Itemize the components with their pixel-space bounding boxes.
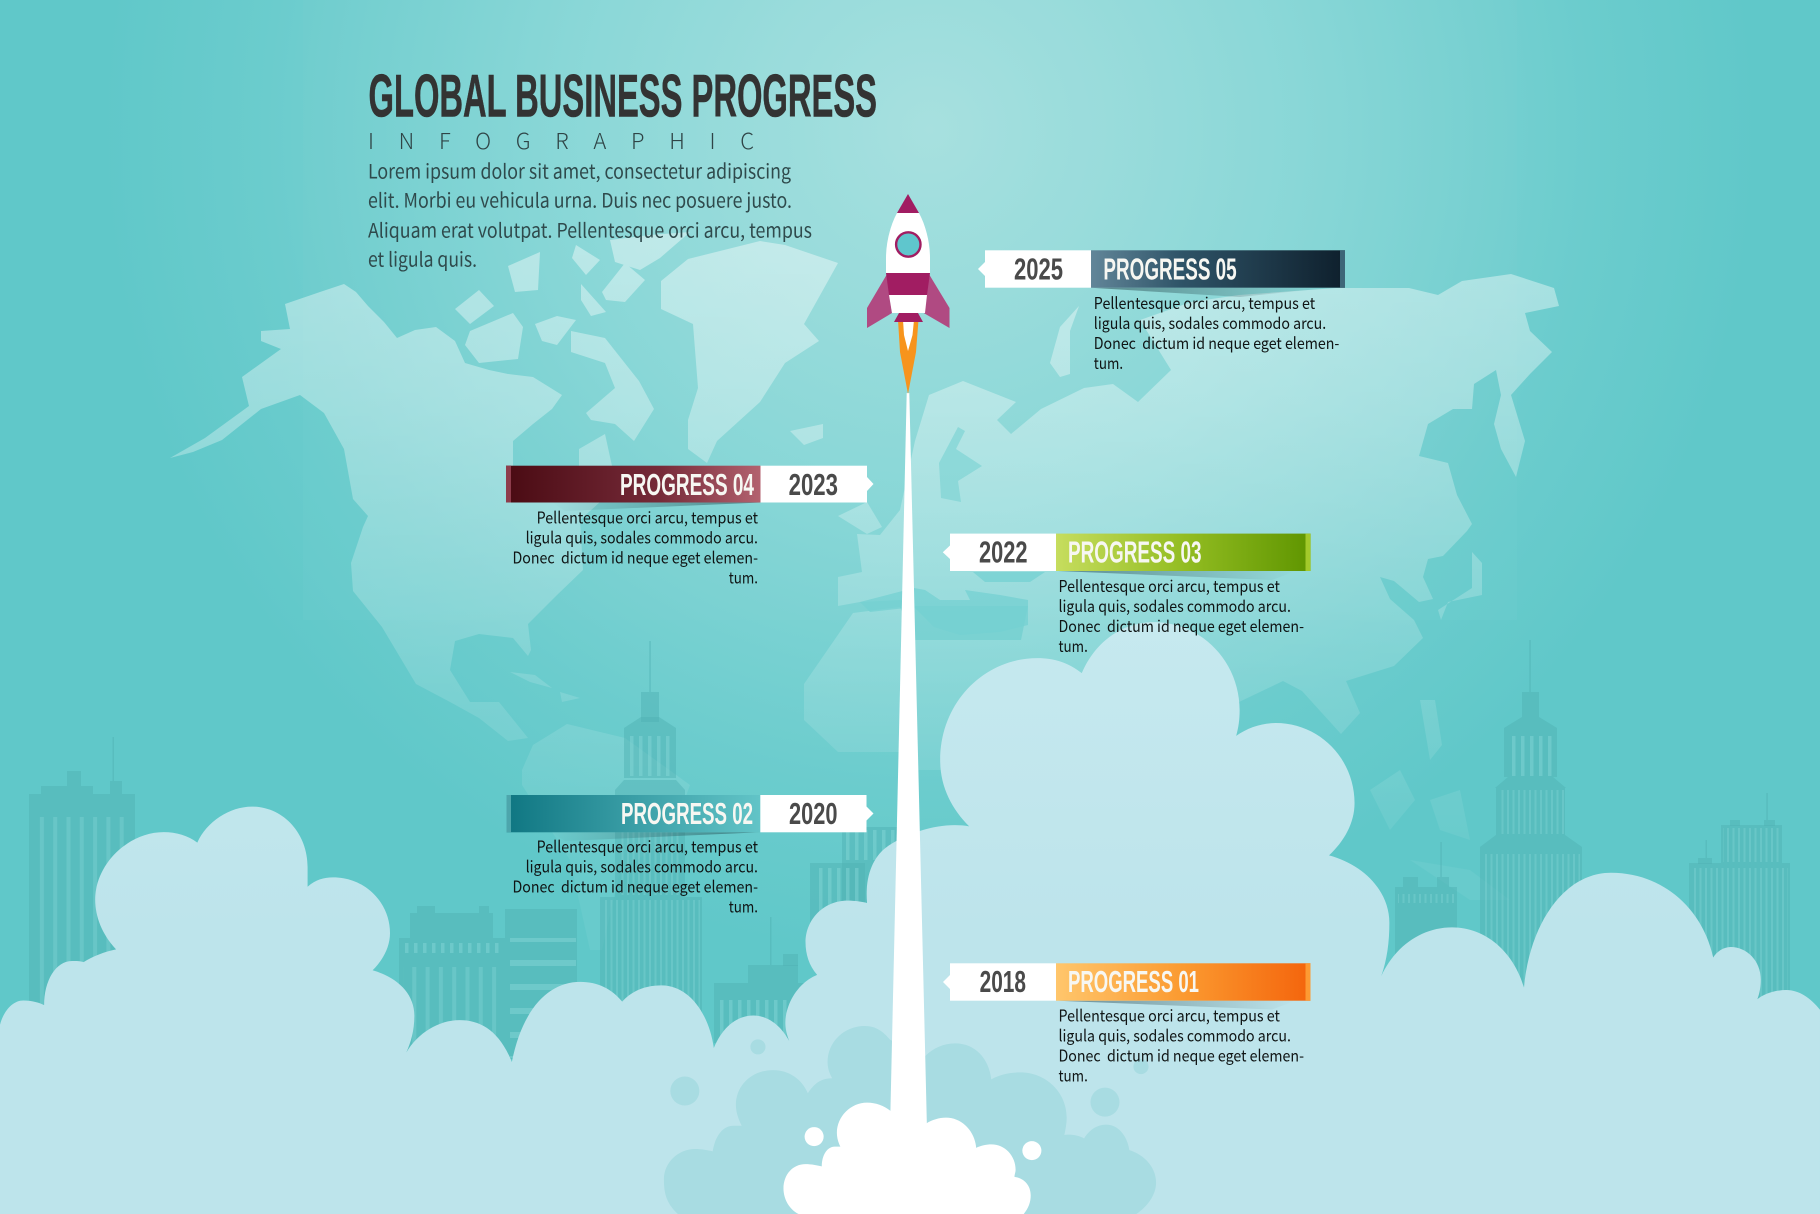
- building: right tall tower: [1480, 640, 1582, 1017]
- map: Caribbean: [510, 672, 580, 702]
- building: centre tall tower: [600, 641, 702, 1037]
- milestone: 2018 progress 01: ligula quis, sodales commodo arcu.: [1058, 1023, 1291, 1047]
- intro paragraph: elit. Morbi eu vehicula urna. Duis nec posuere justo.: [368, 185, 792, 214]
- sea: Mediterranean: [860, 588, 1028, 635]
- background light band: [303, 0, 1517, 620]
- title: GLOBAL BUSINESS PROGRESS: [368, 62, 877, 130]
- intro paragraph: Lorem ipsum dolor sit amet, consectetur adipiscing: [368, 155, 791, 184]
- building: right small block: [1395, 842, 1457, 977]
- body band: [886, 273, 930, 295]
- main cloud: [0, 622, 1820, 1214]
- sea: Black Sea: [973, 572, 1045, 582]
- smoke dots: [670, 1039, 1149, 1117]
- milestone: 2020 progress 02: PROGRESS 02: [621, 797, 753, 831]
- map: Arctic islands: [455, 232, 690, 441]
- milestone: 2022 progress 03: Donec dictum id neque eget elemen-: [1058, 613, 1304, 637]
- map: Eurasia: [838, 274, 1559, 770]
- building: banded block: [505, 909, 577, 1059]
- map: Africa: [804, 607, 915, 770]
- milestone: 2025 progress 05: PROGRESS 05: [1103, 252, 1237, 286]
- milestone: 2018 progress 01: PROGRESS 01: [1068, 965, 1199, 999]
- milestone: 2025 progress 05: Pellentesque orci arcu, tempus et: [1094, 290, 1315, 314]
- map: inland seas: [860, 427, 1045, 635]
- milestone: 2022 progress 03: tum.: [1058, 633, 1088, 657]
- milestone: 2022 progress 03: PROGRESS 03: [1068, 536, 1202, 570]
- intro paragraph: et ligula quis.: [368, 244, 477, 273]
- milestone: 2022 progress 03: 2022: [979, 536, 1028, 570]
- map: Novaya Zemlya: [1050, 306, 1079, 377]
- milestone: 2025 progress 05: tum.: [1094, 350, 1123, 374]
- clouds group: [0, 622, 1820, 1214]
- flame inner: [903, 320, 914, 351]
- milestone: 2023 progress 04: Donec dictum id neque eget elemen-: [512, 545, 758, 569]
- milestone: 2025 progress 05: [978, 250, 1345, 374]
- white exhaust puff: [783, 1103, 1041, 1214]
- building: lower centre block: [714, 917, 807, 1043]
- map: Iceland: [790, 424, 823, 445]
- nose cone: [897, 194, 919, 213]
- city skyline: [29, 640, 1790, 1060]
- milestone: 2018 progress 01: Donec dictum id neque eget elemen-: [1058, 1043, 1304, 1067]
- building: right far block: [1689, 793, 1790, 1003]
- subtitle: INFOGRAPHIC: [368, 124, 754, 156]
- map: Japan: [1438, 552, 1482, 620]
- map: South America: [522, 724, 690, 950]
- rocket exhaust beam: [890, 393, 927, 1130]
- sea: Baltic: [939, 427, 982, 502]
- milestone: 2018 progress 01: [943, 963, 1310, 1087]
- milestone: 2023 progress 04: ligula quis, sodales commodo arcu.: [526, 525, 758, 549]
- milestone: 2025 progress 05: ligula quis, sodales commodo arcu.: [1094, 310, 1326, 334]
- map: Greenland: [661, 241, 838, 463]
- milestone: 2025 progress 05: Donec dictum id neque eget elemen-: [1094, 330, 1339, 354]
- milestone: 2022 progress 03: [943, 534, 1311, 657]
- milestone: 2020 progress 02: 2020: [789, 797, 838, 831]
- milestone: 2023 progress 04: PROGRESS 04: [620, 468, 754, 502]
- flame outer: [898, 320, 918, 394]
- intro paragraph: Aliquam erat volutpat. Pellentesque orci arcu, tempus: [368, 214, 812, 243]
- map: Southeast Asia and Australia: [1370, 700, 1510, 900]
- map: UK: [838, 502, 882, 534]
- milestone: 2022 progress 03: Pellentesque orci arcu, tempus et: [1058, 573, 1280, 597]
- fins: [867, 275, 950, 328]
- milestone: 2020 progress 02: [506, 795, 874, 917]
- milestone: 2023 progress 04: tum.: [729, 565, 758, 589]
- milestone: 2023 progress 04: [506, 466, 874, 589]
- window: [896, 232, 920, 257]
- nozzle: [894, 313, 923, 322]
- milestone: 2020 progress 02: Donec dictum id neque eget elemen-: [512, 873, 758, 897]
- milestone: 2018 progress 01: Pellentesque orci arcu, tempus et: [1058, 1003, 1280, 1027]
- milestone: 2020 progress 02: tum.: [729, 893, 758, 917]
- body: [886, 213, 930, 273]
- milestone: 2020 progress 02: ligula quis, sodales commodo arcu.: [526, 853, 758, 877]
- intro paragraph: [368, 155, 812, 273]
- milestone: 2023 progress 04: Pellentesque orci arcu, tempus et: [537, 505, 758, 529]
- milestone: 2022 progress 03: ligula quis, sodales commodo arcu.: [1058, 593, 1291, 617]
- milestone: 2025 progress 05: 2025: [1014, 252, 1063, 286]
- building: towers by the beam: [810, 827, 898, 953]
- building: left low block: [399, 906, 505, 1060]
- map: North America: [170, 284, 640, 741]
- milestone: 2023 progress 04: 2023: [789, 468, 838, 502]
- milestone: 2020 progress 02: Pellentesque orci arcu, tempus et: [537, 833, 758, 857]
- world map: [170, 232, 1559, 950]
- milestone: 2018 progress 01: 2018: [980, 965, 1026, 999]
- rocket: [867, 194, 950, 394]
- building: far left tower: [29, 737, 135, 1054]
- milestone: 2018 progress 01: tum.: [1058, 1063, 1088, 1087]
- inner smoke cloud: [664, 1026, 1156, 1214]
